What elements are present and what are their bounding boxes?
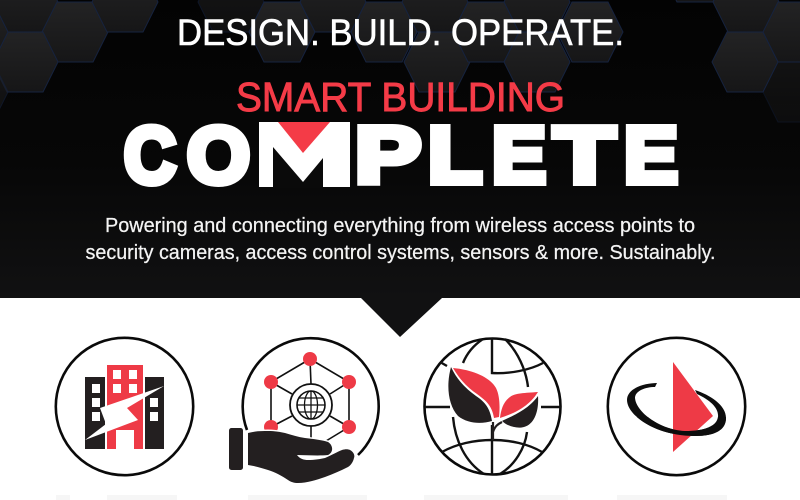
- description text: Powering and connecting everything from wireless access points to: [105, 215, 695, 237]
- faint cropped captions: [56, 495, 727, 500]
- description text: [86, 215, 716, 264]
- main title: P: [355, 110, 421, 200]
- tagline: DESIGN. BUILD. OPERATE.: [177, 11, 624, 53]
- icon: smart building with lightning bolt: [56, 338, 193, 475]
- dark header panel: [0, 0, 800, 337]
- main title: O: [187, 110, 250, 200]
- icon: orbit around red triangle: [608, 338, 745, 475]
- main title: E: [492, 110, 546, 200]
- main title: C: [124, 110, 176, 200]
- description text: security cameras, access control systems, sensors & more. Sustainably.: [86, 242, 716, 264]
- main title: L: [428, 110, 482, 200]
- main title: T: [554, 110, 615, 200]
- subtitle: SMART BUILDING: [236, 74, 565, 120]
- main title: [124, 110, 678, 200]
- hexagon background pattern: [0, 0, 800, 122]
- main title: E: [624, 110, 678, 200]
- icon: hand holding network globe: [229, 338, 379, 483]
- icon: globe with plant: [424, 338, 561, 475]
- main title: M: [262, 110, 347, 200]
